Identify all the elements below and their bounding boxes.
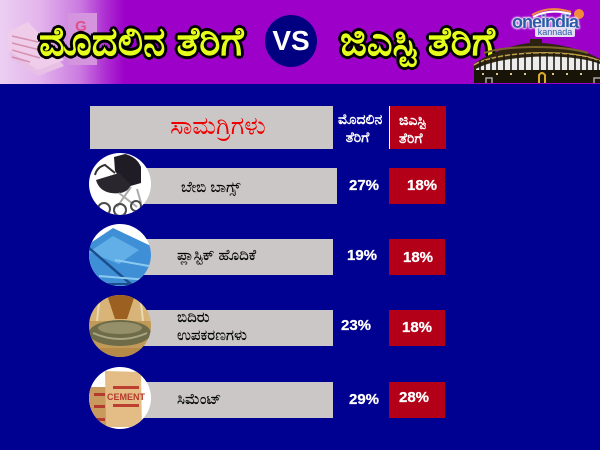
panel: column headers: [90, 106, 446, 149]
VS badge: VS: [272, 25, 310, 56]
heading: GST column text: ತೆರಿಗೆ: [399, 130, 423, 146]
value box: GST 18%: [389, 168, 445, 204]
row: cement: [89, 367, 445, 429]
value box: GST 18%: [389, 239, 445, 275]
icon: parliament building: [474, 39, 600, 83]
row: plastic sheet: [89, 224, 445, 286]
value: previous 19%: 19%: [347, 247, 377, 264]
value: previous 27%: 27%: [349, 177, 379, 194]
heading: previous tax column: ಮೊದಲಿನ: [338, 111, 382, 127]
heading: GST column: [389, 106, 446, 149]
label: baby products: ಬೇಬಿ ಬಾಗ್ಸ್: [181, 179, 240, 196]
logo: oneindia kannada: [510, 8, 584, 37]
label: cement: ಸಿಮೆಂಟ್: [177, 391, 221, 408]
heading: previous tax column: [338, 111, 382, 145]
title: previous tax: ಮೊದಲಿನ ತೆರಿಗೆ: [39, 20, 244, 64]
icon: pram photo: [89, 153, 151, 215]
VS badge: [265, 15, 317, 67]
heading: GST column text: [399, 112, 426, 146]
icon: cement bags photo: [89, 367, 151, 429]
value: GST 18%: 18%: [402, 319, 432, 336]
icon: GST boxes graphic: [10, 13, 97, 76]
label: plastic sheet: ಪ್ಲಾಸ್ಟಿಕ್ ಹೊದಿಕೆ: [177, 247, 256, 264]
label bar: [139, 168, 337, 204]
value: GST 18%: 18%: [407, 177, 437, 194]
heading: materials: [90, 106, 333, 149]
label bar: [139, 382, 333, 418]
value: GST 18%: 18%: [403, 249, 433, 266]
logo wordmark: oneindia: [512, 12, 578, 32]
value box: GST 18%: [389, 310, 445, 346]
label: bamboo products: ಉಪಕರಣಗಳು: [177, 327, 247, 344]
value: GST 28%: 28%: [399, 389, 429, 406]
row: baby products: [89, 153, 445, 215]
icon: GST boxes graphic: G: [75, 18, 87, 35]
icon: bamboo chandelier photo: [89, 295, 151, 357]
label bar: [139, 239, 333, 275]
value: previous 23%: 23%: [341, 317, 371, 334]
logo arc: [532, 8, 584, 19]
header banner: [0, 0, 600, 84]
logo subtext: kannada: [538, 27, 572, 37]
value box: GST 28%: [389, 382, 445, 418]
heading: GST column text: ಜಿಎಸ್ಟಿ: [399, 112, 426, 128]
icon: cement bags photo: CEMENT: [107, 392, 146, 402]
heading: materials: ಸಾಮಗ್ರಿಗಳು: [170, 112, 266, 140]
title: GST tax: ಜಿಎಸ್ಟಿ ತೆರಿಗೆ: [340, 20, 495, 64]
label bar: [139, 310, 333, 346]
icon: tarpaulin photo: [89, 224, 151, 286]
value: previous 29%: 29%: [349, 391, 379, 408]
label: bamboo products: [177, 309, 247, 344]
label: bamboo products: ಬಿದಿರು: [177, 309, 209, 326]
row: bamboo products: [89, 295, 445, 357]
heading: previous tax column: ತೆರಿಗೆ: [346, 129, 369, 145]
